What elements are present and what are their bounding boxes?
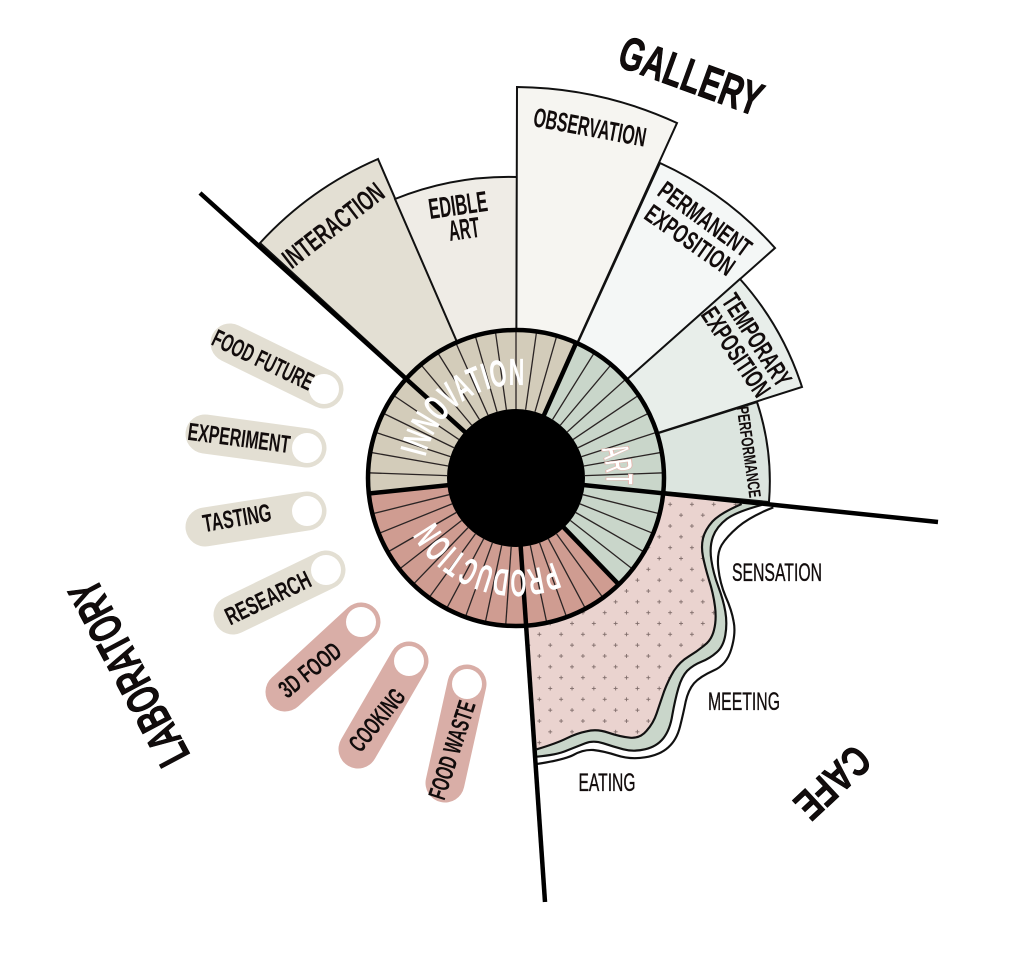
pill: research: RESEARCH: [221, 566, 316, 631]
pill: food future: FOOD FUTURE: [208, 324, 318, 396]
label: permanent exposition: PERMANENT: [652, 175, 758, 263]
panel: central ring: [198, 191, 938, 902]
ring sector: innovation: [368, 330, 576, 494]
label: permanent exposition: EXPOSITION: [639, 198, 741, 282]
label: edible art: ART: [447, 212, 482, 248]
wedge: interaction: [260, 159, 516, 478]
pink area base: [516, 478, 742, 749]
ring spokes: [368, 330, 664, 626]
label: interaction: INTERACTION: [276, 176, 390, 274]
pill: food waste: FOOD WASTE: [423, 697, 482, 803]
pill: food waste: [423, 669, 482, 803]
label: meeting: MEETING: [708, 688, 780, 716]
ring label: production: PRODUCTION: [413, 522, 562, 597]
heading: cafe: CAFE: [785, 736, 880, 829]
heading: gallery: GALLERY: [612, 25, 770, 126]
heading: laboratory: LABORATORY: [58, 571, 200, 775]
label: temporary exposition: EXPOSITION: [695, 301, 777, 403]
wedge: permanent exposition: [516, 163, 775, 478]
pink area plus pattern: [516, 478, 742, 749]
thick divider lines: [200, 193, 938, 902]
ring outline: [368, 330, 664, 626]
label: edible art: [427, 186, 490, 248]
ring label: innovation: INNOVATION: [400, 358, 523, 456]
wavy outlines: [537, 504, 773, 764]
ring sector: production: [369, 478, 619, 626]
label: performance: PERFORMANCE: [733, 405, 764, 499]
wedge: performance: [516, 402, 770, 502]
label: observation: OBSERVATION: [531, 102, 649, 153]
wedge: observation: [516, 87, 677, 478]
label: temporary exposition: TEMPORARY: [716, 288, 798, 392]
pill: food future: [208, 324, 339, 404]
label: edible art: EDIBLE: [427, 186, 490, 226]
panel: cafe area: [516, 478, 773, 764]
pill: 3d food: 3D FOOD: [273, 637, 347, 704]
panel: gallery wedges: [260, 87, 802, 502]
wedge: temporary exposition: [516, 279, 802, 478]
centre black disc: [447, 409, 585, 547]
ring label: art: ART: [601, 446, 634, 484]
pill: cooking: COOKING: [343, 683, 411, 757]
label: eating: EATING: [578, 769, 636, 797]
label: sensation: SENSATION: [732, 559, 822, 587]
label: temporary exposition: [695, 288, 798, 403]
pill: tasting: TASTING: [201, 499, 273, 538]
pill: experiment: EXPERIMENT: [186, 418, 292, 459]
green band: [516, 478, 762, 757]
wedge: edible art: [395, 177, 517, 478]
label: permanent exposition: [639, 175, 758, 282]
ring sector: art: [516, 343, 664, 584]
